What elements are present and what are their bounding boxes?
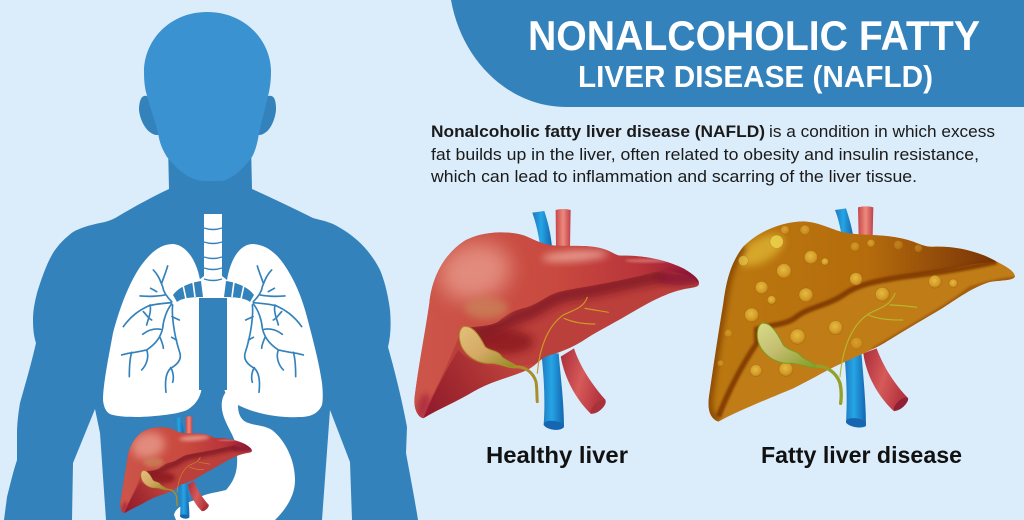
description: fat builds up in the liver, often related to obesity and insulin resistance, (431, 145, 979, 164)
description: Nonalcoholic fatty liver disease (NAFLD) (431, 122, 765, 141)
title line 1: NONALCOHOLIC FATTY (528, 12, 980, 59)
label: fatty liver disease: Fatty liver disease (761, 442, 962, 468)
description (430, 122, 995, 186)
left lung (103, 244, 202, 417)
stomach (174, 392, 295, 520)
fatty liver illustration (709, 206, 1015, 428)
small healthy liver in body (120, 416, 254, 519)
description: is a condition in which excess (769, 122, 995, 141)
right ear (252, 96, 276, 135)
trachea and bronchi (173, 214, 254, 390)
label: healthy liver: Healthy liver (486, 442, 628, 468)
healthy liver illustration (414, 209, 703, 431)
head (144, 12, 271, 181)
bronchial tree right (245, 266, 303, 392)
left ear (139, 96, 165, 135)
title line 2: LIVER DISEASE (NAFLD) (578, 59, 933, 94)
right lung (223, 244, 323, 417)
human body silhouette (4, 145, 418, 520)
description: which can lead to inflammation and scarring of the liver tissue. (430, 167, 917, 186)
title banner (451, 0, 1024, 107)
bronchial tree left (122, 266, 180, 392)
